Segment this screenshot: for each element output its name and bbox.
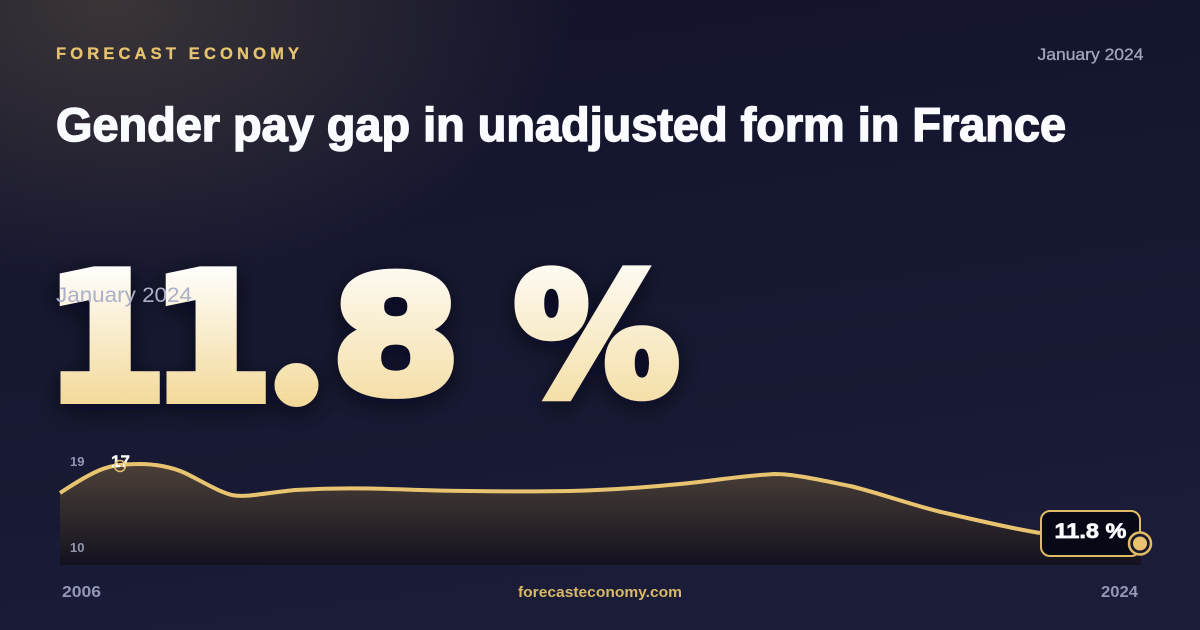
latest value callout <box>1041 511 1140 556</box>
big value: 1 <box>151 238 273 441</box>
brand label: FORECAST ECONOMY <box>56 45 299 63</box>
axis label 19: 19 <box>70 454 84 469</box>
peak marker: 17 <box>111 452 130 471</box>
latest value callout: 11.8 % <box>1054 520 1127 543</box>
big value: % <box>514 240 679 434</box>
date top right: January 2024 <box>1038 46 1144 64</box>
date overlapping value: January 2024 <box>56 284 192 307</box>
big value: 1 <box>45 238 167 441</box>
chart line <box>60 464 1040 533</box>
latest value marker <box>1129 532 1151 554</box>
axis label 10: 10 <box>70 540 84 555</box>
big value: 8 <box>332 244 460 430</box>
x axis start year: 2006 <box>62 584 101 601</box>
big value: . <box>285 344 308 414</box>
area chart <box>60 452 1151 565</box>
big value <box>45 238 679 441</box>
website: forecasteconomy.com <box>518 584 682 601</box>
chart area fill <box>60 464 1141 565</box>
x axis end year: 2024 <box>1101 584 1138 601</box>
title: Gender pay gap in unadjusted form in France <box>56 98 1066 151</box>
